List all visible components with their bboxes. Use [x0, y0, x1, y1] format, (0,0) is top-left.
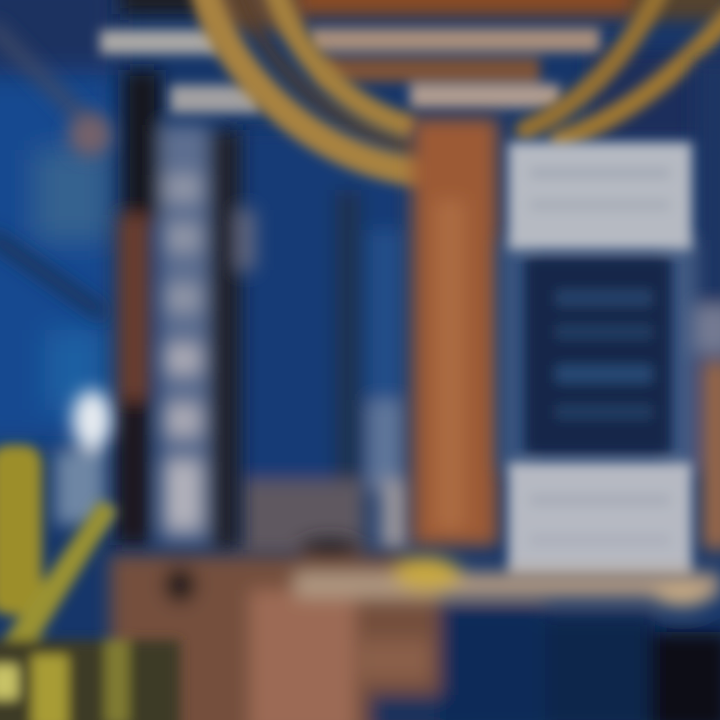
yellow plant leaves	[0, 445, 180, 720]
floor and furniture	[110, 538, 720, 720]
pale ceiling beams	[100, 28, 600, 113]
left blue wall	[0, 0, 120, 445]
central blue windows	[240, 130, 408, 555]
panel bottom	[508, 462, 692, 578]
panel top	[508, 142, 692, 250]
pale and dark left columns	[116, 70, 256, 550]
white highlight at left	[55, 113, 112, 525]
left wall diagonal lines	[0, 25, 105, 315]
panel middle	[526, 258, 670, 453]
right panel	[508, 142, 692, 578]
orange central column	[412, 118, 498, 546]
right panel backdrop	[500, 60, 720, 550]
gold arcs	[205, 0, 720, 172]
top ceiling band	[120, 0, 720, 140]
